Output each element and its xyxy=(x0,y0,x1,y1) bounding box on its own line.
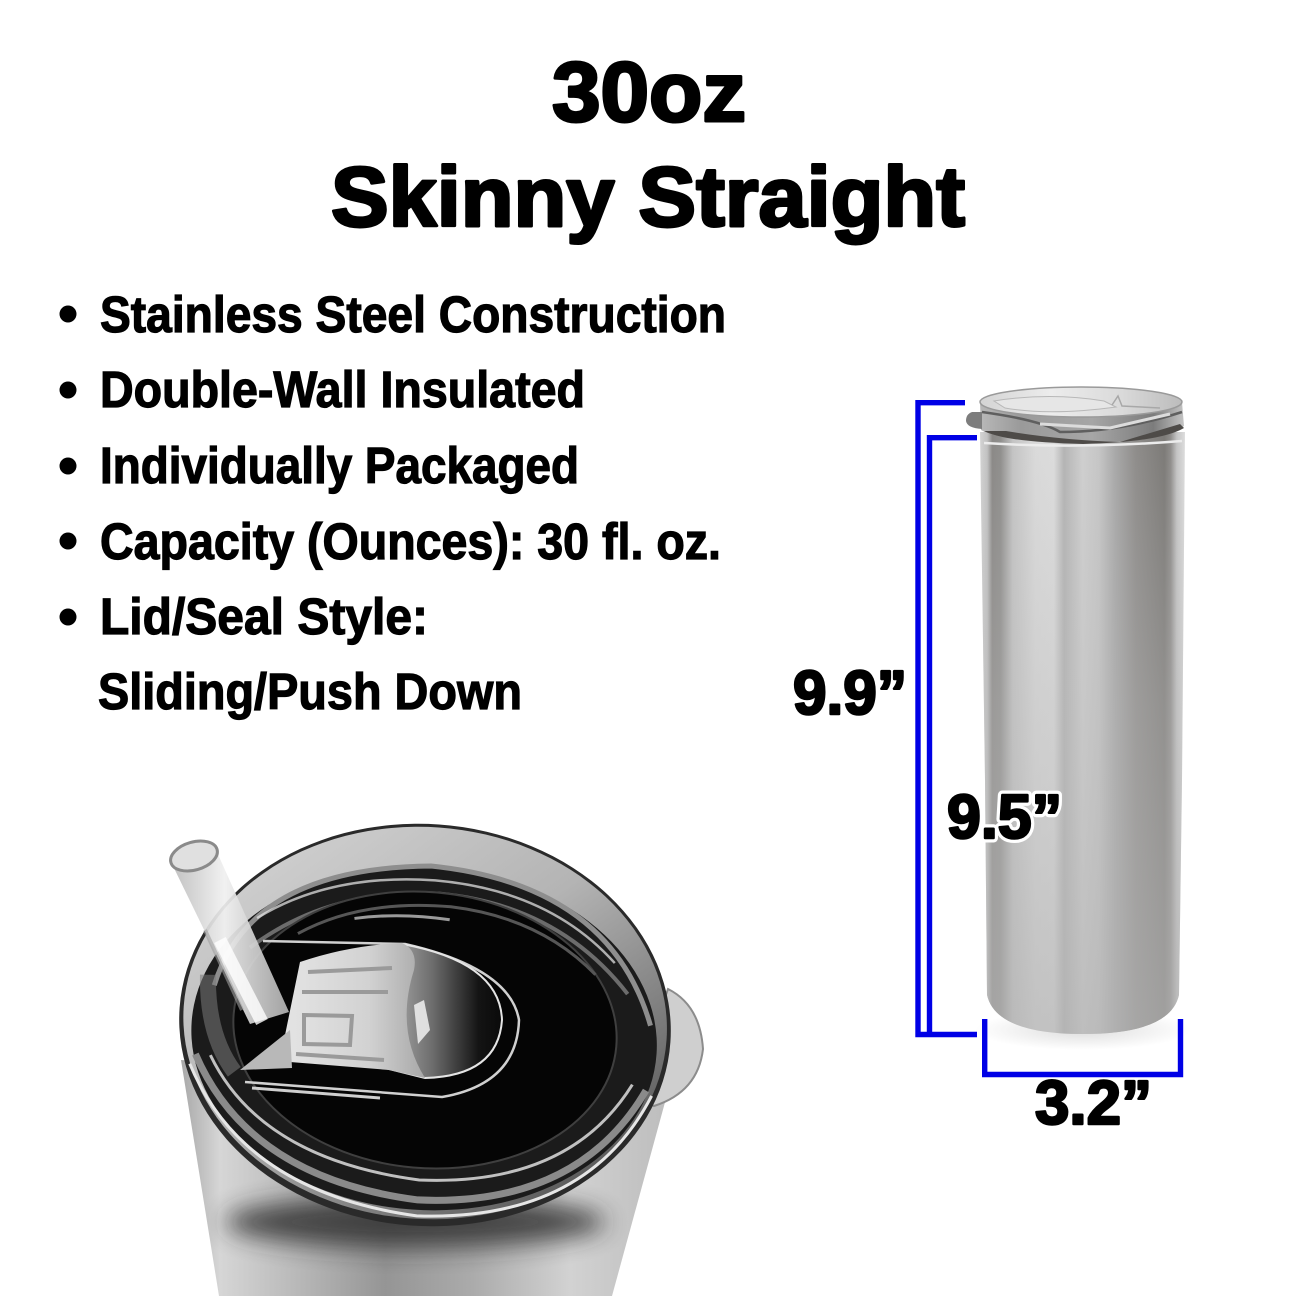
steel cup body xyxy=(181,1060,667,1296)
bullet: lid style: Sliding/Push Down xyxy=(98,663,522,720)
sliding opening outline xyxy=(245,941,519,1097)
rim highlights xyxy=(180,850,667,1232)
floor shadow xyxy=(975,1010,1191,1050)
bracket: diameter xyxy=(985,1019,1180,1074)
feature list xyxy=(60,286,726,720)
bracket: body height xyxy=(930,438,977,1034)
label: 9.5 inches: 9.5” xyxy=(947,783,1062,852)
photo: full tumbler xyxy=(966,387,1191,1050)
tumbler lid xyxy=(966,387,1184,444)
bracket: overall height xyxy=(918,403,977,1034)
lid black centre xyxy=(222,876,628,1184)
bullet: lid style: Lid/Seal Style: xyxy=(100,588,428,645)
lid tab xyxy=(966,412,982,429)
tumbler body xyxy=(980,432,1185,1034)
bullet: lid style xyxy=(60,588,522,720)
title xyxy=(331,45,965,244)
label: 9.9 inches: 9.9” xyxy=(793,659,907,728)
photo: lid close-up xyxy=(166,807,703,1296)
dimension brackets xyxy=(918,403,1180,1074)
slider xyxy=(240,943,502,1098)
label: 3.2 inches: 3.2” xyxy=(1035,1069,1152,1138)
lid rim xyxy=(166,807,684,1243)
bullet: stainless steel: Stainless Steel Construction xyxy=(100,286,726,343)
bullet: packaging: Individually Packaged xyxy=(100,437,579,494)
label: 9.5 inches: 9.5” xyxy=(947,783,1062,852)
bullet: capacity: Capacity (Ounces): 30 fl. oz. xyxy=(100,513,721,570)
title: Skinny Straight xyxy=(331,150,965,244)
lid tab xyxy=(630,989,703,1106)
straw xyxy=(167,836,289,1024)
title: 30oz xyxy=(552,45,746,139)
bullet: double-wall: Double-Wall Insulated xyxy=(100,361,585,418)
dimension labels xyxy=(793,659,1152,1138)
